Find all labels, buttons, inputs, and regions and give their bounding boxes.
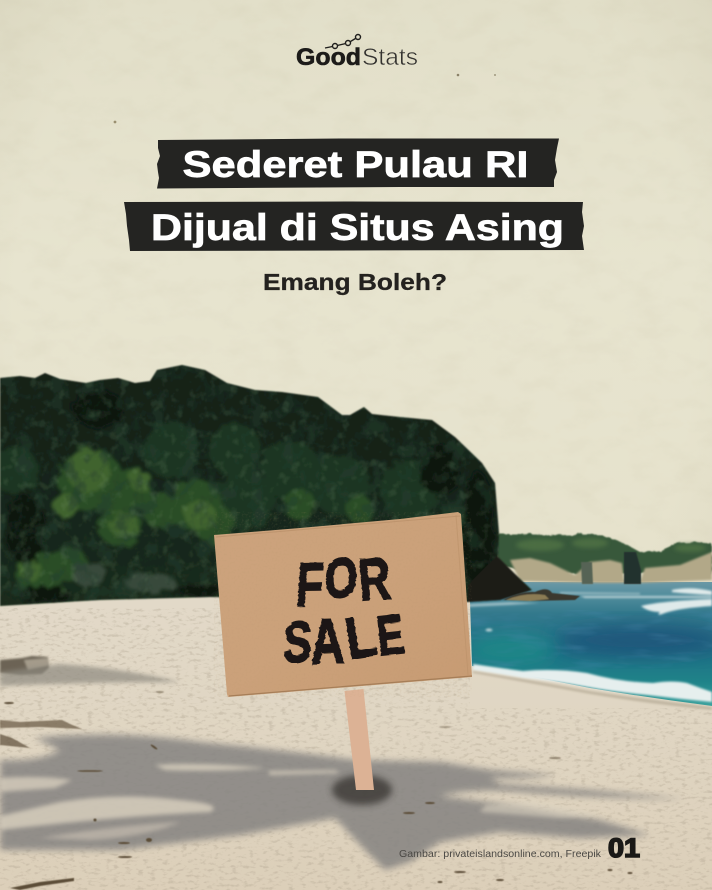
beach photo bbox=[0, 360, 712, 890]
wooden post bbox=[344, 689, 374, 790]
title strip 1: Sederet Pulau RI bbox=[182, 143, 528, 185]
rocks at headland foot bbox=[503, 589, 580, 601]
sea bbox=[460, 582, 712, 707]
word: FOR bbox=[294, 545, 393, 620]
brush lettering: FOR SALE bbox=[283, 545, 407, 678]
shoreline foam bbox=[473, 664, 712, 702]
tree canopy highlights bbox=[0, 392, 494, 604]
forested island bbox=[0, 360, 540, 610]
headland cliffs bbox=[510, 552, 712, 583]
logo wordmark: Good bbox=[296, 44, 361, 71]
sign hole shadow bbox=[332, 775, 392, 805]
light patches in shadow bbox=[0, 764, 600, 840]
sea colour patches bbox=[555, 624, 712, 656]
subtitle: Emang Boleh? bbox=[263, 269, 447, 295]
breaking waves bbox=[467, 588, 712, 632]
driftwood bbox=[0, 656, 49, 675]
word: SALE bbox=[283, 602, 407, 678]
word: FOR: R bbox=[356, 545, 393, 614]
sand beach bbox=[0, 597, 712, 890]
footer bbox=[399, 833, 640, 863]
word: FOR: F bbox=[294, 551, 326, 620]
far headland bbox=[497, 534, 712, 584]
logo icon: rising line chart bbox=[325, 34, 360, 48]
image credit: Gambar: privateislandsonline.com, Freepik bbox=[399, 849, 602, 860]
palm tree shadow bbox=[0, 735, 685, 870]
title strip 2: Dijual di Situs Asing bbox=[151, 206, 564, 248]
word: SALE: E bbox=[374, 602, 407, 668]
cardboard panel bbox=[214, 512, 472, 697]
title strip 1 bbox=[157, 138, 559, 188]
debris on sand bbox=[0, 691, 632, 890]
logo: GoodStats bbox=[296, 34, 418, 71]
beach shadows bbox=[0, 664, 685, 870]
title strip 2 bbox=[124, 202, 584, 251]
island rock base bbox=[468, 555, 532, 602]
word: SALE: S bbox=[283, 609, 313, 676]
word: FOR: O bbox=[324, 545, 359, 610]
for sale sign bbox=[214, 512, 472, 805]
heading: title strips bbox=[124, 138, 584, 295]
word: SALE: A bbox=[309, 605, 345, 678]
word: SALE: L bbox=[341, 603, 381, 672]
logo: GoodStats: Stats bbox=[362, 44, 418, 71]
wet sand edge bbox=[473, 671, 712, 710]
page number: 01 bbox=[608, 833, 640, 863]
